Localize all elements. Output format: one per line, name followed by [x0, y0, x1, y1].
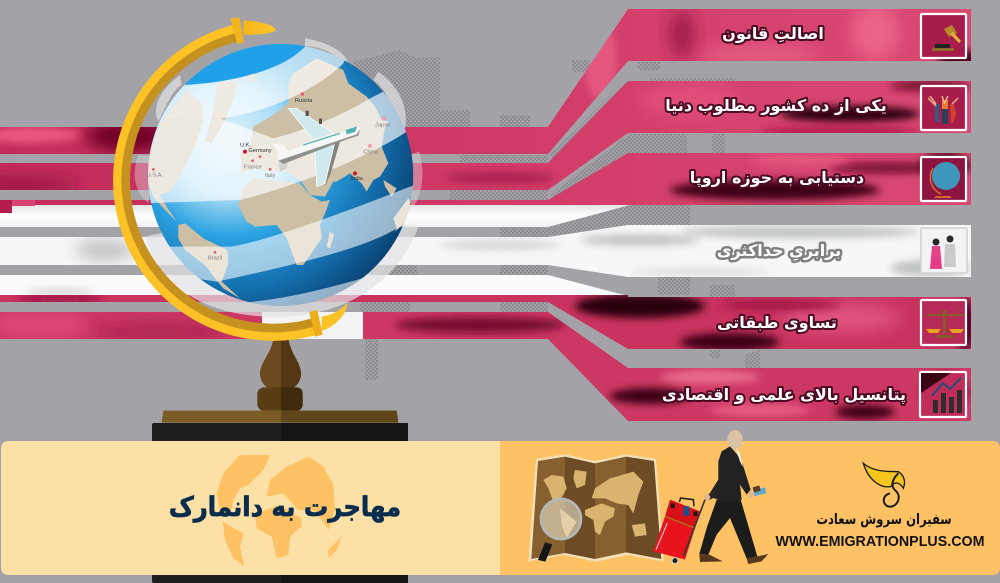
ribbon 5 — [0, 295, 971, 349]
label Japan: Japan — [375, 123, 390, 129]
label Germany: Germany — [248, 148, 272, 154]
magnifier — [538, 499, 581, 562]
globe — [135, 38, 422, 317]
white ribbon upper strip — [0, 200, 630, 227]
icon: globe — [921, 157, 966, 201]
title: مهاجرت به دانمارک — [169, 492, 401, 523]
row 1 text: اصالتِ قانون — [722, 24, 824, 43]
land masses — [147, 58, 412, 298]
label Brazil: Brazil — [208, 255, 222, 261]
label France: France — [244, 165, 262, 171]
bottom arc pin — [309, 303, 347, 337]
knob shadow — [281, 387, 303, 411]
translucent latitude bands — [148, 46, 413, 306]
bottom panel left — [1, 441, 500, 575]
man figure — [699, 430, 768, 564]
dotted world map backdrop — [353, 50, 760, 380]
logo wing — [863, 463, 904, 488]
folded map and magnifier — [528, 454, 664, 562]
ribbon 2 — [0, 81, 971, 190]
label India: India — [351, 176, 364, 182]
label Italy: Italy — [265, 173, 276, 179]
map folds — [531, 457, 661, 559]
ribbon 4: white — [0, 225, 1000, 277]
neck shadow half — [281, 338, 301, 388]
logo — [863, 463, 904, 507]
plinth shadow — [281, 411, 398, 423]
glass halo pieces — [135, 38, 422, 317]
ocean — [148, 44, 413, 306]
globe stand lower part — [162, 338, 398, 423]
city markers — [152, 92, 386, 254]
icon: scales — [921, 300, 966, 345]
row 5 text: تساوی طبقاتی — [717, 313, 837, 332]
globe sphere — [148, 44, 414, 306]
wooden neck — [260, 338, 301, 388]
website: WWW.EMIGRATIONPLUS.COM — [776, 534, 984, 550]
logo swirl — [884, 473, 899, 507]
label UK: U.K. — [240, 142, 251, 148]
stand arc outer — [118, 28, 315, 336]
suitcase — [653, 498, 705, 564]
icon: cheering people — [921, 86, 966, 130]
ribbon 3 — [35, 153, 971, 205]
city labels — [147, 92, 390, 261]
ribbon 1 — [0, 9, 971, 154]
row 4 text: برابریِ حداکثری — [717, 241, 841, 261]
row 3 text: دستیابی به حوزه اروپا — [690, 168, 864, 188]
globe ring and pins — [118, 17, 347, 337]
top cap — [184, 44, 306, 86]
plinth black block — [152, 423, 408, 583]
white ribbon lower strip — [0, 275, 628, 296]
label China: China — [363, 149, 379, 155]
label Russia: Russia — [295, 98, 313, 104]
map continents — [543, 470, 647, 538]
ribbon 6 — [0, 310, 1000, 425]
knob — [257, 387, 303, 411]
suitcase and walking man — [653, 430, 768, 564]
world silhouette — [217, 455, 342, 566]
bottom panel right — [500, 441, 1000, 575]
icon: gavel — [921, 14, 966, 58]
top arc pin — [231, 17, 276, 44]
icon: couple — [921, 228, 967, 273]
icon: growth chart — [920, 372, 966, 417]
label USA: U.S.A. — [147, 173, 163, 179]
airplane — [272, 108, 360, 187]
company name: سفیران سروش سعادت — [816, 512, 952, 528]
plinth top — [162, 411, 398, 423]
map sheet — [528, 454, 664, 562]
stand arc inner scale — [126, 36, 313, 328]
row 6 text: پتانسیل بالای علمی و اقتصادی — [662, 385, 906, 405]
row 2 text: یکی از ده کشور مطلوب دنیا — [665, 96, 887, 115]
